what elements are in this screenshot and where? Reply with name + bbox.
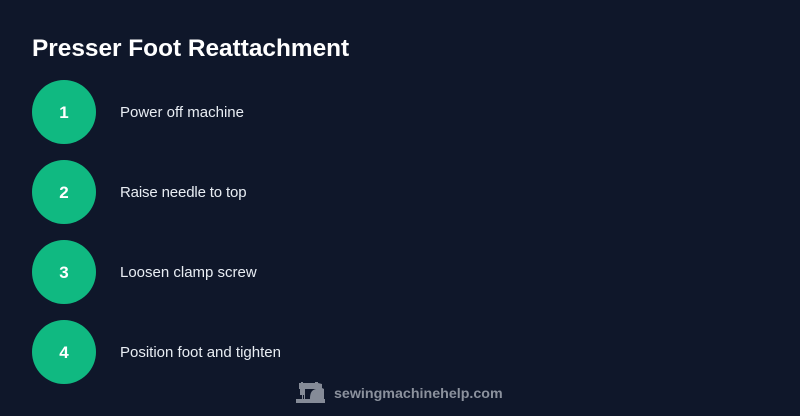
step 1 number circle (32, 80, 96, 144)
step 3 text: Loosen clamp screw (120, 264, 257, 281)
step 4 text: Position foot and tighten (120, 344, 281, 361)
step 1 number circle: 1 (59, 103, 69, 122)
step 4 number circle: 4 (59, 343, 69, 362)
step 2 text: Raise needle to top (120, 184, 246, 201)
footer brand text: sewingmachinehelp.com (334, 386, 503, 402)
step 1 text: Power off machine (120, 104, 244, 121)
step 4 number circle (32, 320, 96, 384)
title: Presser Foot Reattachment (32, 35, 349, 62)
icon: sewing machine (296, 382, 325, 403)
step 2 number circle: 2 (59, 183, 69, 202)
step 2 number circle (32, 160, 96, 224)
step 3 number circle (32, 240, 96, 304)
step 3 number circle: 3 (59, 263, 69, 282)
